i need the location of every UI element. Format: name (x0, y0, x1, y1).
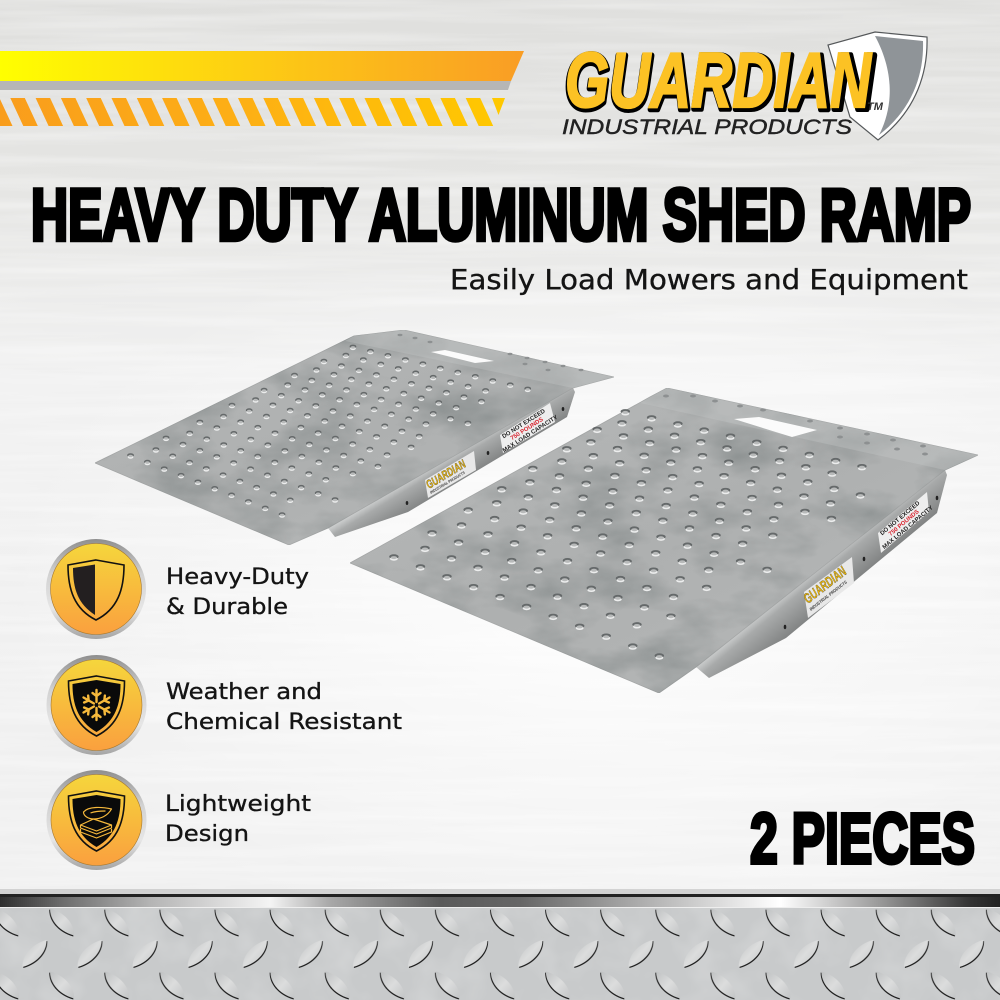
label (165, 791, 311, 847)
label: Lightweight (165, 791, 311, 817)
logo: Guardian Industrial Products (562, 32, 927, 140)
warning sticker: 750 POUNDS (888, 509, 921, 538)
brand sticker: INDUSTRIAL PRODUCTS (809, 580, 848, 612)
brand sticker: GUARDIAN (423, 457, 468, 492)
trademark: TM (867, 101, 884, 113)
yellow-orange bar (0, 51, 524, 81)
warning sticker: DO NOT EXCEED (880, 500, 922, 537)
ramp side flange (328, 388, 575, 537)
ramp lip (345, 330, 614, 388)
grey bar (0, 81, 511, 90)
label (166, 564, 309, 620)
header accent bars (0, 51, 524, 126)
feature: lightweight design (46, 770, 311, 870)
tagline: INDUSTRIAL PRODUCTS (562, 116, 852, 139)
shadow above bar (0, 889, 1000, 895)
label: Design (165, 821, 249, 847)
handle slot (431, 350, 494, 363)
brand sticker (423, 451, 476, 498)
label: Weather and (166, 679, 322, 705)
wordmark shadow: GUARDIAN (565, 38, 875, 126)
icon: logo shield (828, 32, 927, 140)
ramp side flange (696, 470, 947, 678)
label: Heavy-Duty (166, 564, 309, 590)
label: Chemical Resistant (166, 709, 402, 735)
ramp plate (350, 388, 978, 693)
feature: heavy-duty and durable (46, 539, 309, 639)
plate edge highlight (0, 907, 1000, 908)
plate base (0, 907, 1000, 1000)
mounting holes (784, 496, 938, 629)
plate texture (0, 907, 1000, 1000)
footer: diamond plate band (0, 889, 1000, 1000)
brand sticker (800, 557, 854, 618)
wordmark: GUARDIAN (565, 36, 872, 124)
brand sticker: GUARDIAN (800, 563, 850, 606)
handle slot (734, 417, 817, 437)
icon: snowflake shield badge (46, 655, 146, 755)
product: small ramp (95, 330, 614, 545)
warning sticker: MAX LOAD CAPACITY (882, 505, 935, 551)
subtitle: Easily Load Mowers and Equipment (450, 263, 968, 296)
warning sticker (874, 492, 935, 553)
icon: half-filled shield badge (46, 539, 146, 639)
label (166, 679, 402, 735)
dark rule (0, 894, 1000, 897)
hazard stripes (0, 98, 505, 126)
brand sticker: INDUSTRIAL PRODUCTS (429, 470, 466, 495)
warning sticker: DO NOT EXCEED (501, 408, 547, 440)
warning sticker: 750 POUNDS (510, 417, 545, 442)
tread dots (131, 347, 528, 523)
lip dots (398, 334, 584, 371)
warning sticker (495, 403, 559, 454)
lip dots (663, 394, 928, 456)
tread dots (394, 411, 888, 658)
feature: weather and chemical resistant (46, 655, 402, 755)
label: & Durable (166, 594, 288, 620)
icon: layered sheets shield badge (46, 770, 146, 870)
tread pattern (0, 907, 1000, 1000)
product: large ramp (350, 388, 978, 693)
ramp lip (640, 388, 978, 470)
ramp plate (95, 330, 614, 545)
steel gradient bar (0, 897, 1000, 907)
mounting holes (406, 407, 564, 505)
warning sticker: MAX LOAD CAPACITY (502, 415, 559, 454)
